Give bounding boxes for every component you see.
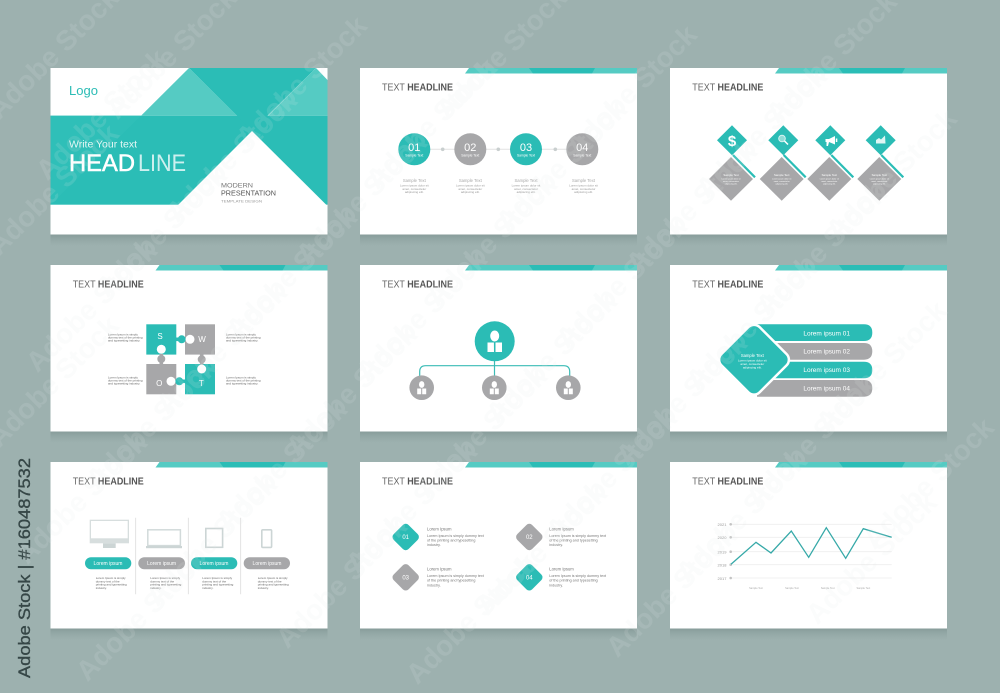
diamond pair 1: dollar: adipiscing elit. <box>725 182 738 186</box>
swot text: bottom left: and typesetting industry. <box>108 382 140 386</box>
cover tagline: PRESENTATION <box>221 191 276 198</box>
step 03: Sample Text <box>515 178 538 183</box>
diamond pair 3: megaphone: adipiscing elit. <box>823 182 836 186</box>
swot text: bottom right: Lorem Ipsum is simply <box>226 376 256 380</box>
watermark: Adobe Stock <box>480 286 623 429</box>
item 02: 02 <box>526 535 533 541</box>
watermark: Adobe Stock <box>600 520 743 663</box>
watermark: Adobe Stock <box>680 253 823 396</box>
watermark: Adobe Stock <box>750 178 893 321</box>
device column 4 <box>244 557 290 590</box>
cover tagline: MODERN <box>221 183 253 190</box>
line chart: 2020 <box>718 535 727 540</box>
device column 2: Lorem Ipsum is simply <box>150 576 181 580</box>
step 02: adipiscing elit. <box>461 190 480 194</box>
line chart <box>718 522 892 590</box>
line chart: 2017 <box>718 576 727 581</box>
step 03: amet, consectetur <box>514 187 538 191</box>
watermark: Adobe Stock <box>820 103 963 246</box>
diamond pair 4: chart: Lorem ipsum dolor sit <box>870 178 889 180</box>
device column 1: printing and typesetting <box>96 583 127 587</box>
line chart: 2019 <box>718 550 727 554</box>
watermark: Adobe Stock <box>420 169 563 312</box>
watermark: Adobe Stock <box>20 235 163 378</box>
device column 2: dummy text of the <box>150 579 174 583</box>
diamond pair 1: dollar: $ <box>728 133 737 150</box>
device column 1: Lorem ipsum <box>94 561 122 567</box>
puzzle graphic: W <box>198 335 206 344</box>
device column 1: dummy text of the <box>96 579 120 583</box>
swot text: top left <box>108 332 143 342</box>
device column 2: printing and typesetting <box>150 583 182 587</box>
cover headline light part: LINE <box>138 150 186 177</box>
item 04 <box>514 562 606 592</box>
diamond pair 1: dollar: Lorem ipsum dolor sit <box>721 178 741 180</box>
org connector lines <box>420 361 570 376</box>
dividers <box>136 518 241 594</box>
diamond pair 4: chart: adipiscing elit. <box>873 182 886 186</box>
central diamond: Lorem ipsum dolor sit <box>738 359 767 363</box>
watermark: Adobe Stock <box>150 277 293 420</box>
item 01: Lorem Ipsum is simply dummy text <box>427 534 484 538</box>
step 03: Lorem ipsum dolor sit <box>512 184 540 188</box>
watermark: Adobe Stock <box>270 511 413 654</box>
step 04: amet, consectetur <box>572 187 595 191</box>
heading: TEXT HEADLINE <box>382 475 453 487</box>
step 01: adipiscing elit. <box>405 190 424 194</box>
watermark: Adobe Stock <box>140 469 283 612</box>
step 04: Sample Text <box>573 154 591 158</box>
swot text: top right: Lorem Ipsum is simply <box>226 332 256 336</box>
diamond pair 2: magnifier: Lorem ipsum dolor sit <box>772 178 792 180</box>
list bars: Lorem ipsum 01 <box>803 330 850 338</box>
puzzle graphic: S <box>157 332 163 341</box>
watermark: Adobe Stock <box>160 85 303 228</box>
swot text: top left: Lorem Ipsum is simply <box>108 332 138 336</box>
swot text: bottom right <box>226 376 261 386</box>
item 03: of the printing and typesetting <box>427 579 475 583</box>
watermark: Adobe Stock <box>360 52 503 195</box>
swot text: top right: and typesetting industry. <box>226 338 258 342</box>
cover headline: HEAD <box>69 150 135 177</box>
heading: TEXT HEADLINE <box>692 278 763 290</box>
line chart: 2021 <box>718 522 727 527</box>
swot text: bottom left: dummy text of the printing <box>108 378 143 382</box>
watermark: Adobe Stock <box>550 211 693 354</box>
cover tagline: TEMPLATE DESIGN <box>221 200 263 204</box>
device column 4: printing and typesetting <box>258 583 289 587</box>
item 03: 03 <box>402 575 410 581</box>
step 03: Sample Text <box>517 154 535 158</box>
watermark: Adobe Stock <box>490 94 633 237</box>
watermark: Adobe Stock <box>230 10 373 153</box>
heading: TEXT HEADLINE <box>382 82 453 94</box>
item 03: industry. <box>427 583 441 587</box>
watermark: Adobe Stock <box>740 370 883 513</box>
device column 3: industry. <box>202 586 214 590</box>
step 01: 01 <box>408 142 420 154</box>
icon: tablet <box>206 528 223 547</box>
diamond pair 4: chart: Sample Text <box>872 173 887 177</box>
line chart: Sample Text <box>856 587 870 590</box>
swot text: top left: and typesetting industry. <box>108 338 140 342</box>
diamond pair 2: magnifier: amet, consectetur <box>774 180 790 183</box>
item 02: Lorem Ipsum <box>549 526 574 532</box>
item 02: Lorem Ipsum is simply dummy text <box>549 534 606 538</box>
watermark: Adobe Stock <box>10 427 153 570</box>
cover tagline <box>221 183 276 204</box>
diamond pair 1: dollar: Sample Text <box>723 173 739 177</box>
device column 1: industry. <box>96 586 107 590</box>
watermark: Adobe Stock <box>350 244 493 387</box>
step 01 <box>398 133 430 194</box>
step 03: 03 <box>520 142 532 154</box>
step connector <box>414 148 582 151</box>
watermark: Adobe Stock <box>70 544 213 687</box>
watermark: Adobe Stock <box>340 436 483 579</box>
list bars <box>757 324 872 397</box>
device column 3: dummy text of the <box>202 579 226 583</box>
line chart: 2018 <box>718 562 727 568</box>
cover subtitle: Write Your text <box>69 139 137 151</box>
stock image id: Adobe Stock | #160487532 <box>15 458 34 678</box>
puzzle graphic: T <box>199 379 204 388</box>
heading: TEXT HEADLINE <box>382 278 453 290</box>
item 02: of the printing and typesetting <box>549 538 598 542</box>
watermark: Adobe Stock <box>800 487 943 630</box>
step 01: Sample Text <box>405 154 423 158</box>
panel: SWOT puzzle <box>50 265 328 443</box>
line chart: Sample Text <box>749 587 763 590</box>
diamond pair 1: dollar: amet, consectetur <box>723 180 739 183</box>
list bars: Lorem ipsum 02 <box>803 349 850 356</box>
diamond pair 3: megaphone <box>807 125 853 201</box>
step 04: 04 <box>576 142 588 154</box>
person node right <box>556 375 581 400</box>
step 02: amet, consectetur <box>458 187 482 191</box>
watermark: Adobe Stock <box>610 328 753 471</box>
step 02: Sample Text <box>459 178 483 183</box>
panel: org chart <box>360 265 637 443</box>
panel: diamond with list <box>670 265 947 443</box>
swot text: top right: dummy text of the printing <box>226 336 261 340</box>
diamond pair 1: dollar <box>709 125 755 201</box>
watermark: Adobe Stock <box>857 412 1000 555</box>
device column 3: Lorem Ipsum is simply <box>202 576 233 580</box>
device column 2: industry. <box>150 586 162 590</box>
swot text: bottom right: dummy text of the printing <box>226 378 261 382</box>
watermark: Adobe Stock <box>540 403 683 546</box>
item 04: Lorem Ipsum is simply dummy text <box>549 574 606 578</box>
device column 3: Lorem ipsum <box>200 561 228 567</box>
person node left <box>409 375 434 400</box>
diamond pair 3: megaphone: Lorem ipsum dolor sit <box>820 178 839 180</box>
item 04: industry. <box>549 583 563 587</box>
item 03: Lorem Ipsum is simply dummy text <box>427 574 484 578</box>
panel: cover slide <box>50 68 328 246</box>
item 01: industry. <box>427 543 441 547</box>
watermark: Adobe Stock <box>280 319 423 462</box>
heading: TEXT HEADLINE <box>692 475 763 487</box>
logo: Logo <box>69 83 98 98</box>
diamond pair 2: magnifier: adipiscing elit. <box>775 182 788 186</box>
panel: line chart <box>670 462 947 640</box>
diamond pair 4: chart: amet, consectetur <box>871 180 888 183</box>
central diamond: Sample Text <box>741 353 765 358</box>
step 04: adipiscing elit. <box>574 190 593 194</box>
heading: TEXT HEADLINE <box>692 82 763 94</box>
central diamond <box>716 322 792 398</box>
item 04: Lorem Ipsum <box>549 566 574 572</box>
watermark: Adobe Stock <box>400 547 543 690</box>
step 01: Sample Text <box>403 178 427 183</box>
device column 4: Lorem Ipsum is simply <box>258 576 288 580</box>
list bars: Lorem ipsum 04 <box>803 386 850 392</box>
step 01: amet, consectetur <box>402 187 426 191</box>
heading: TEXT HEADLINE <box>73 475 144 487</box>
item 02: industry. <box>549 543 563 547</box>
watermark: Adobe Stock <box>290 127 433 270</box>
device column 2: Lorem ipsum <box>147 561 176 567</box>
swot text: bottom left: Lorem Ipsum is simply <box>108 376 138 380</box>
central diamond: amet, consectetur <box>740 362 764 366</box>
item 04: 04 <box>526 575 533 581</box>
panel: numbered steps <box>360 68 637 246</box>
step 02: 02 <box>464 142 476 154</box>
watermark: Adobe Stock <box>670 445 813 588</box>
diamond pair 3: megaphone: Sample Text <box>822 173 837 177</box>
device column 3: printing and typesetting <box>202 583 234 587</box>
panel: devices <box>50 462 328 640</box>
step 03 <box>510 133 542 194</box>
watermark: Adobe Stock <box>620 136 763 279</box>
icon: laptop <box>146 530 182 548</box>
puzzle graphic <box>146 324 215 394</box>
watermark: Adobe Stock <box>810 295 953 438</box>
item 02 <box>514 522 606 552</box>
watermark: Adobe Stock <box>210 394 353 537</box>
person node center <box>482 375 507 400</box>
item 03: Lorem Ipsum <box>427 566 452 572</box>
line chart: Sample Text <box>821 587 835 590</box>
step 02: Lorem ipsum dolor sit <box>456 184 485 188</box>
device column 3 <box>191 557 237 590</box>
device column 1 <box>85 557 131 590</box>
watermark: Adobe Stock <box>80 352 223 495</box>
swot text: top left: dummy text of the printing <box>108 336 143 340</box>
watermark: Adobe Stock <box>220 202 363 345</box>
device column 4: Lorem ipsum <box>253 561 281 567</box>
step 04: Lorem ipsum dolor sit <box>569 184 598 188</box>
device column 2 <box>138 557 185 590</box>
item 01 <box>391 522 484 552</box>
puzzle graphic: O <box>156 379 162 388</box>
swot text: bottom right: and typesetting industry. <box>226 382 258 386</box>
item 03 <box>391 562 484 592</box>
diamond pair 3: megaphone: amet, consectetur <box>821 180 838 183</box>
watermark: Adobe Stock <box>30 43 173 186</box>
top person node <box>475 321 515 361</box>
item 01: 01 <box>402 535 410 541</box>
line chart: Sample Text <box>785 587 799 590</box>
step 04 <box>566 133 598 194</box>
panel: four text items <box>360 462 637 640</box>
watermark: Adobe Stock <box>90 160 233 303</box>
device column 4: industry. <box>258 586 269 590</box>
swot text: bottom left <box>108 376 143 386</box>
item 01: of the printing and typesetting <box>427 538 475 542</box>
device column 1: Lorem Ipsum is simply <box>96 576 126 580</box>
device column 4: dummy text of the <box>258 579 282 583</box>
watermark: Adobe Stock <box>690 61 833 204</box>
step 01: Lorem ipsum dolor sit <box>400 184 429 188</box>
step 02: Sample Text <box>461 154 479 158</box>
central diamond: adipiscing elit. <box>743 366 762 370</box>
icon: phone <box>262 530 272 547</box>
item 01: Lorem Ipsum <box>427 526 452 532</box>
icon: monitor <box>90 520 129 548</box>
panel: diamond icons <box>670 68 947 246</box>
watermark: Adobe Stock <box>410 361 553 504</box>
step 02 <box>454 133 486 194</box>
watermark: Adobe Stock <box>560 19 703 162</box>
diamond pair 2: magnifier <box>760 125 806 201</box>
watermark: Adobe Stock <box>470 478 613 621</box>
step 04: Sample Text <box>572 178 596 183</box>
step 03: adipiscing elit. <box>517 190 536 194</box>
heading: TEXT HEADLINE <box>73 278 144 290</box>
item 04: of the printing and typesetting <box>549 579 598 583</box>
diamond pair 2: magnifier: Sample Text <box>774 173 790 177</box>
list bars: Lorem ipsum 03 <box>803 367 850 374</box>
swot text: top right <box>226 332 261 342</box>
diamond pair 4: chart <box>857 125 903 201</box>
